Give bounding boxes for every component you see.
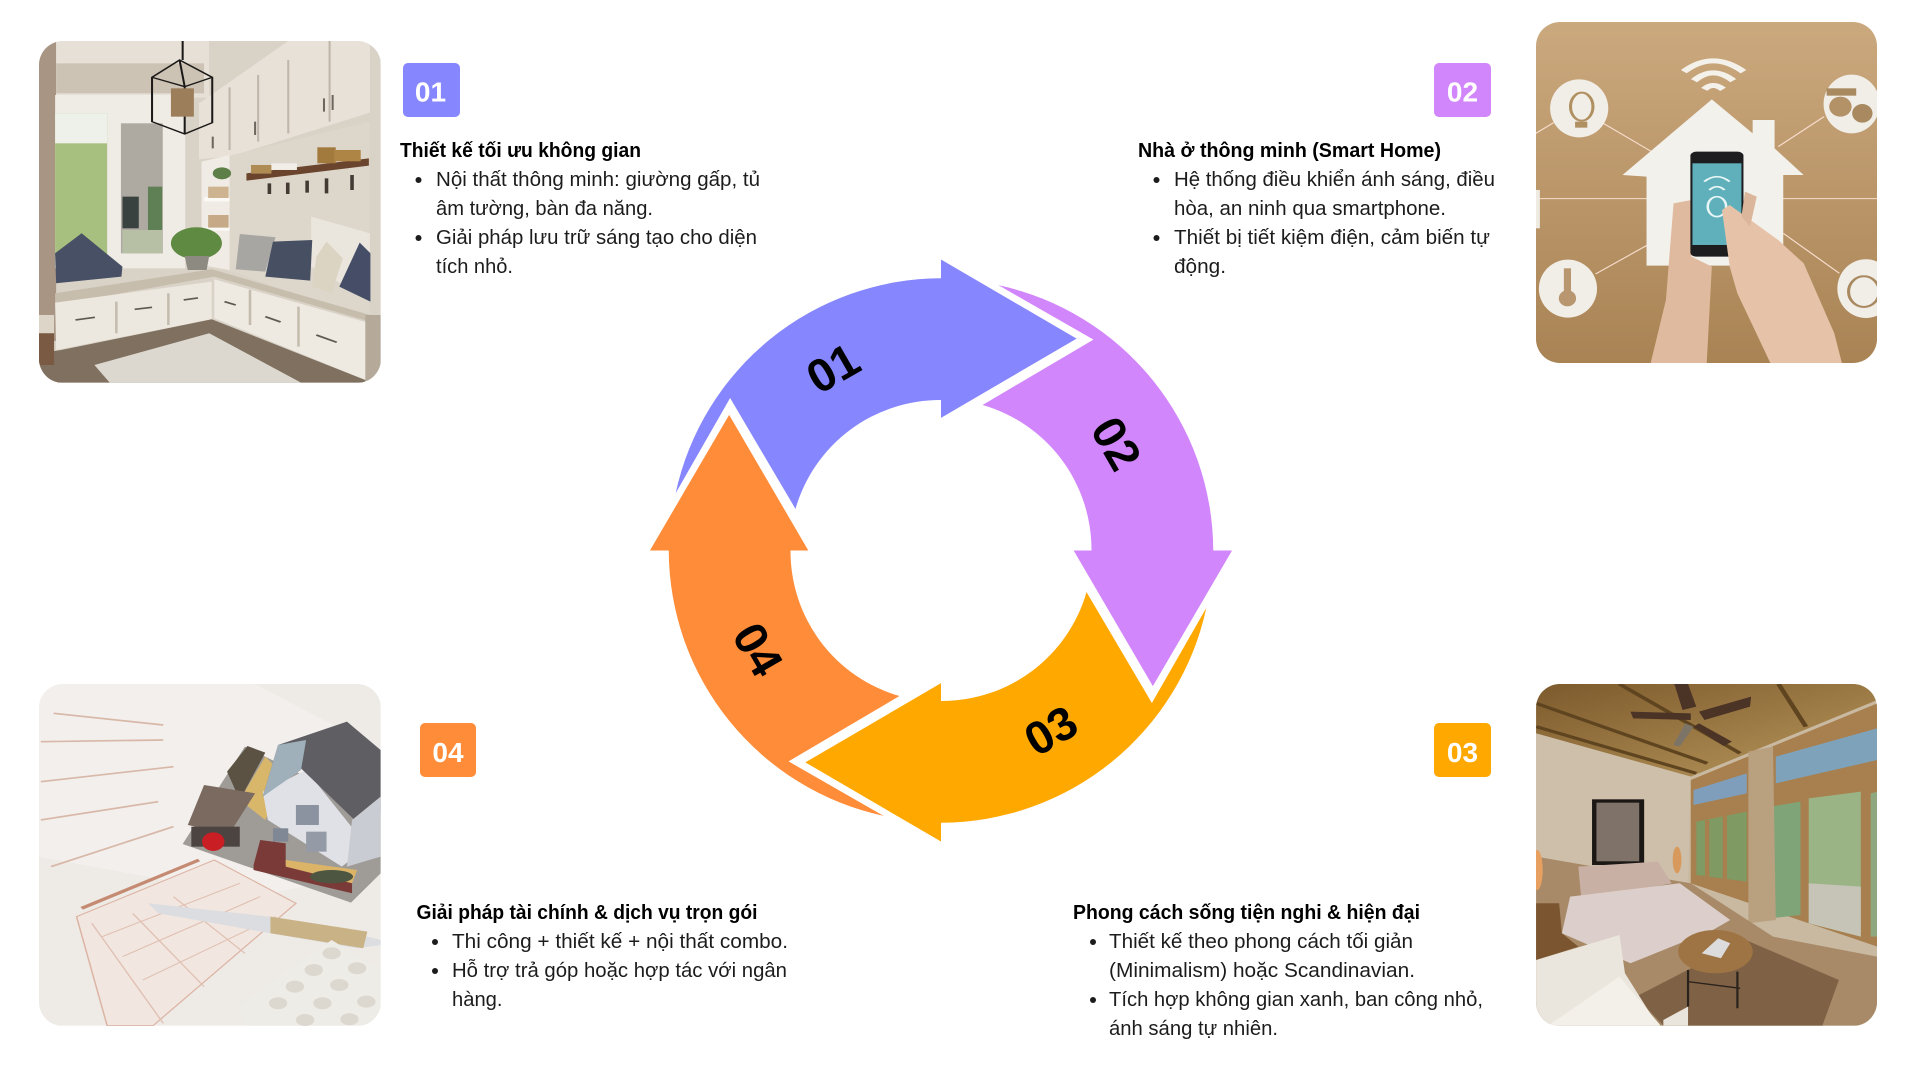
- text block: Nhà ở thông minh: Nhà ở thông minh (Smart Home): [1138, 139, 1441, 162]
- badge 03: [1434, 723, 1491, 777]
- text block: Giải pháp tài chính: hàng.: [452, 988, 502, 1011]
- arrow 01: [676, 259, 1077, 509]
- text block: Phong cách sống tiện nghi: ánh sáng tự nhiên.: [1109, 1017, 1278, 1040]
- text block: Thiết kế tối ưu không gian: Thiết kế tối ưu không gian: [400, 139, 641, 162]
- photo: built-in storage nook: [39, 41, 381, 383]
- text block: Thiết kế tối ưu không gian: [400, 139, 760, 278]
- text block: Thiết kế tối ưu không gian: âm tường, bàn đa năng.: [436, 197, 653, 220]
- badge 02: 02: [1447, 76, 1478, 108]
- text block: Phong cách sống tiện nghi: Tích hợp không gian xanh, ban công nhỏ,: [1109, 988, 1483, 1011]
- text block: Thiết kế tối ưu không gian: tích nhỏ.: [436, 255, 513, 278]
- text block: Giải pháp tài chính: Hỗ trợ trả góp hoặc hợp tác với ngân: [452, 959, 787, 982]
- text block: Giải pháp tài chính: [416, 901, 788, 1011]
- text block: Phong cách sống tiện nghi: Thiết kế theo phong cách tối giản: [1109, 930, 1413, 953]
- number 02: 02: [1081, 408, 1152, 479]
- photo: model house with tax papers: [39, 684, 381, 1026]
- text block: Phong cách sống tiện nghi: (Minimalism) hoặc Scandinavian.: [1109, 959, 1415, 982]
- badge 02: [1434, 63, 1491, 117]
- number 03: 03: [1015, 695, 1086, 766]
- text block: Nhà ở thông minh: Thiết bị tiết kiệm điện, cảm biến tự: [1174, 226, 1490, 249]
- text block: Phong cách sống tiện nghi: Phong cách sống tiện nghi & hiện đại: [1073, 901, 1420, 924]
- badge 01: 01: [415, 76, 446, 108]
- text block: Nhà ở thông minh: [1138, 139, 1495, 278]
- badge 03: 03: [1447, 737, 1478, 768]
- arrow 04: [650, 415, 899, 816]
- photo: smart home: [1536, 22, 1894, 363]
- arrow 03: [805, 592, 1206, 842]
- number 01: 01: [798, 333, 868, 404]
- cycle diagram: [650, 259, 1232, 842]
- badge 04: [420, 723, 476, 777]
- badge 01: [403, 63, 460, 117]
- badge 04: 04: [432, 737, 464, 768]
- text block: Phong cách sống tiện nghi: [1073, 901, 1483, 1040]
- text block: Nhà ở thông minh: Hệ thống điều khiển ánh sáng, điều: [1174, 168, 1495, 191]
- text block: Nhà ở thông minh: động.: [1174, 255, 1226, 278]
- text block: Giải pháp tài chính: Giải pháp tài chính & dịch vụ trọn gói: [416, 901, 758, 924]
- arrow 02: [983, 285, 1232, 686]
- text block: Giải pháp tài chính: Thi công + thiết kế + nội thất combo.: [452, 930, 788, 953]
- text block: Nhà ở thông minh: hòa, an ninh qua smartphone.: [1174, 197, 1446, 220]
- photo: bedroom with garden view: [1532, 684, 1877, 1026]
- text block: Thiết kế tối ưu không gian: Giải pháp lưu trữ sáng tạo cho diện: [436, 226, 757, 249]
- number 04: 04: [722, 614, 793, 685]
- text block: Thiết kế tối ưu không gian: Nội thất thông minh: giường gấp, tủ: [436, 168, 760, 191]
